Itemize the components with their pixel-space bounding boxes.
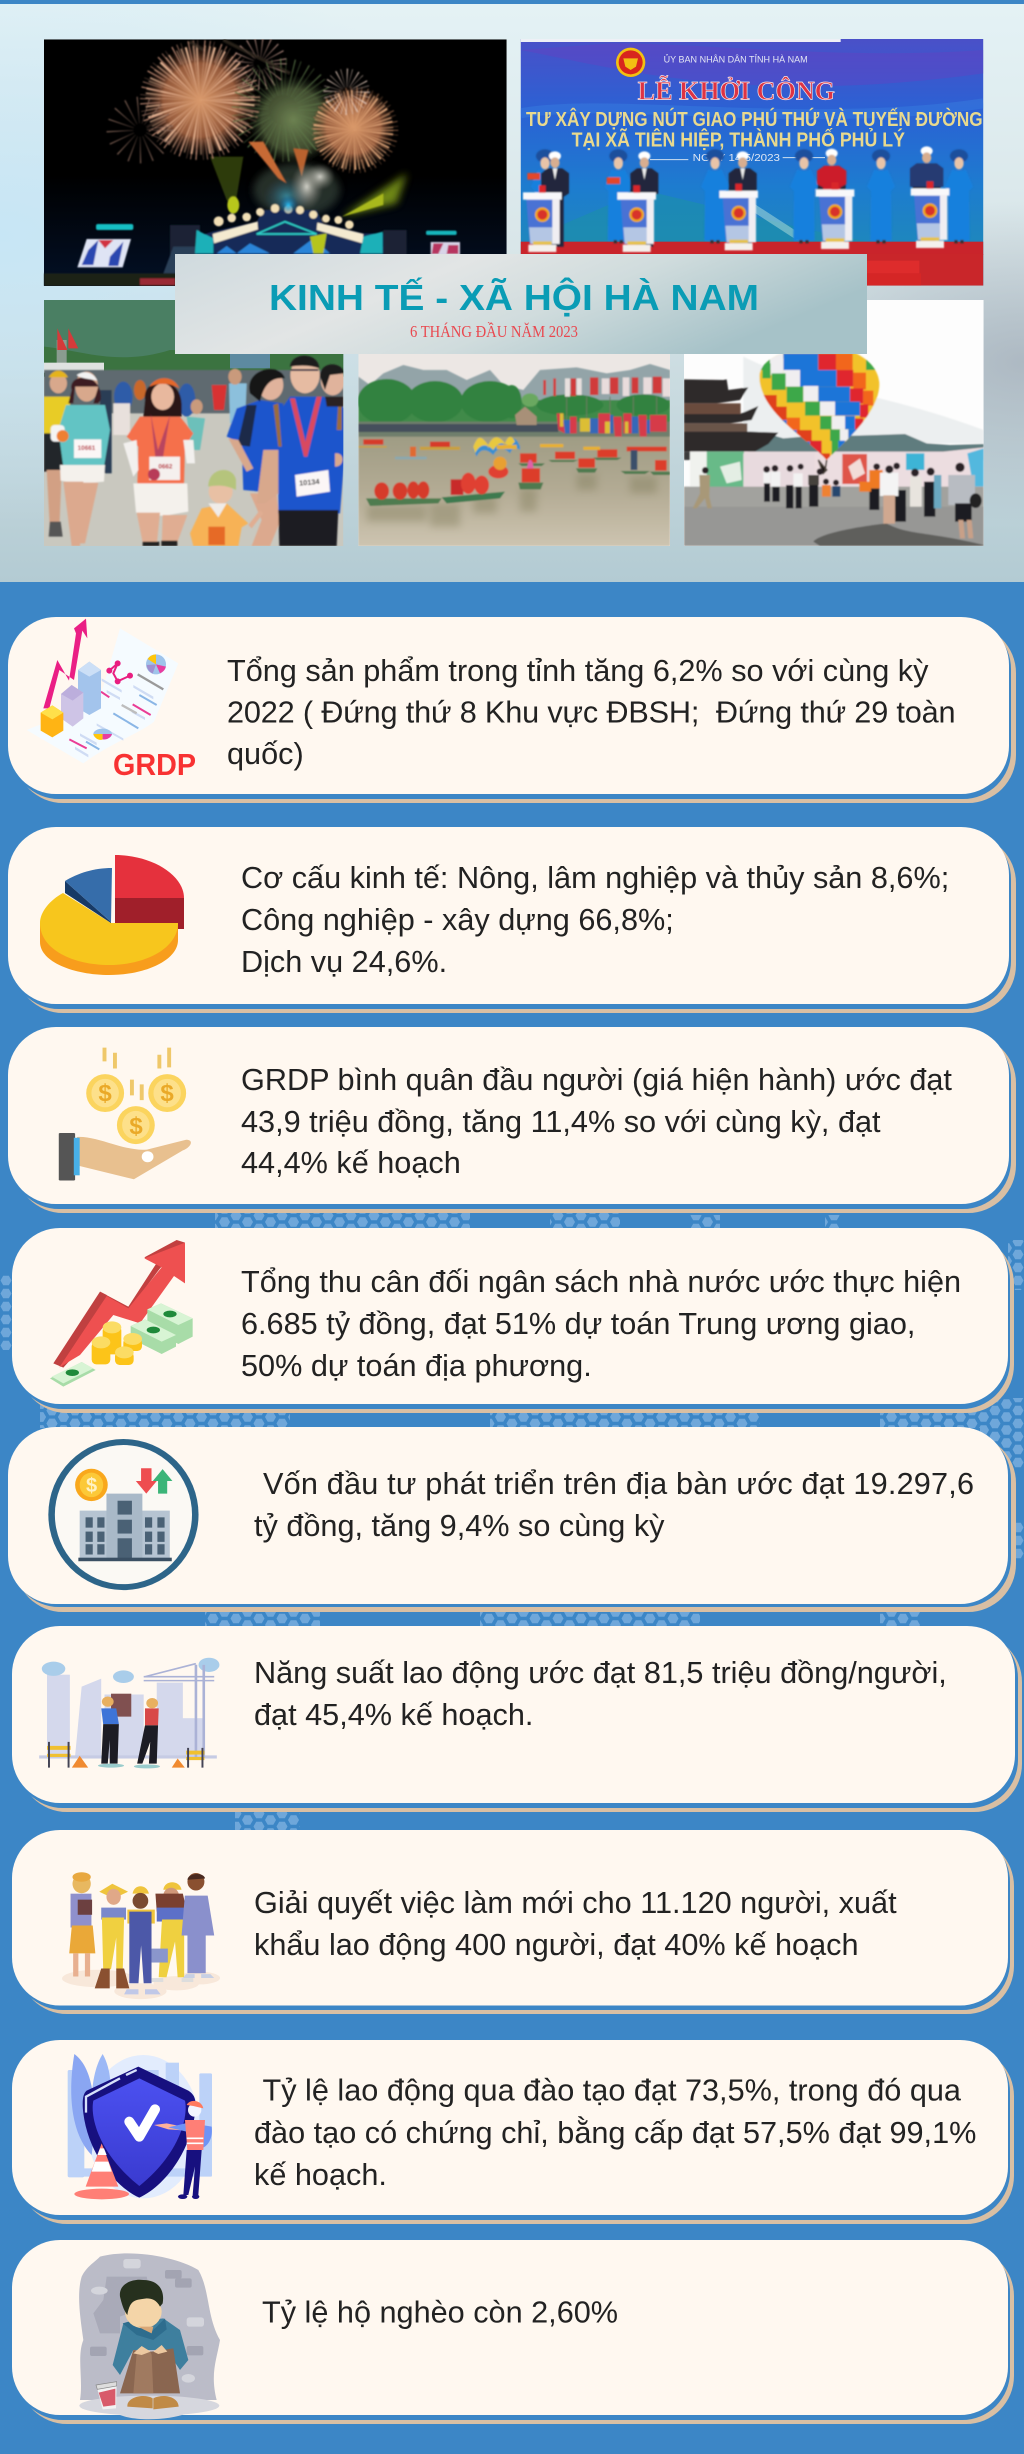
panel: new jobs bbox=[12, 1830, 1014, 2014]
fence banners bbox=[690, 447, 984, 489]
text block: 44,4% kế hoạch bbox=[241, 1146, 461, 1180]
panel: economic structure bbox=[8, 827, 1016, 1013]
text block: đào tạo có chứng chỉ, bằng cấp đạt 57,5% đạt 99,1% bbox=[254, 2115, 976, 2150]
title text: KINH TẾ - XÃ HỘI HÀ NAM bbox=[269, 276, 759, 318]
child with green cap bbox=[190, 470, 263, 546]
dollar signs bbox=[98, 1080, 174, 1140]
text block: 2022 ( Đứng thứ 8 Khu vực ĐBSH; Đứng thứ 29 toàn bbox=[227, 696, 956, 730]
panel: state budget revenue bbox=[12, 1228, 1014, 1413]
text block: quốc) bbox=[227, 737, 304, 771]
dollar signs: $ bbox=[129, 1113, 143, 1140]
GRDP label: GRDP bbox=[113, 747, 196, 782]
text block: Vốn đầu tư phát triển trên địa bàn ước đạt 19.297,6 bbox=[263, 1467, 974, 1501]
runner: blue shirt woman bbox=[227, 369, 285, 546]
emblem bbox=[616, 48, 645, 77]
tree line bbox=[357, 379, 670, 425]
text block: Công nghiệp - xây dựng 66,8%; bbox=[241, 903, 674, 937]
runner: man in blue shirt bbox=[257, 356, 345, 546]
text block: 43,9 triệu đồng, tăng 11,4% so với cùng kỳ, đạt bbox=[241, 1105, 881, 1139]
text block bbox=[254, 1656, 947, 1732]
crowd of visitors bbox=[693, 463, 982, 538]
background crowd bbox=[44, 369, 343, 473]
text block bbox=[254, 2074, 976, 2192]
icon: building in circle bbox=[48, 1439, 199, 1590]
text block: 50% dự toán địa phương. bbox=[241, 1349, 592, 1383]
balloon bbox=[758, 354, 880, 461]
text block: Tỷ lệ lao động qua đào tạo đạt 73,5%, trong đó qua bbox=[262, 2074, 962, 2108]
side screens and lights bbox=[44, 224, 460, 286]
text block: Dịch vụ 24,6%. bbox=[241, 945, 447, 979]
panel: GRDP growth bbox=[8, 617, 1016, 803]
stage backdrop text bbox=[526, 54, 983, 164]
text block: Năng suất lao động ước đạt 81,5 triệu đồng/người, bbox=[254, 1656, 947, 1690]
coin dollar sign: $ bbox=[86, 1475, 97, 1497]
text block: đạt 45,4% kế hoạch. bbox=[254, 1698, 533, 1732]
icon: rising arrow and money bbox=[50, 1240, 193, 1387]
panel: poverty rate bbox=[12, 2240, 1014, 2424]
runner: teal shirt: 10661 bbox=[78, 445, 96, 452]
runner: orange shirt bbox=[123, 378, 195, 546]
subtitle text: 6 THÁNG ĐẦU NĂM 2023 bbox=[410, 322, 578, 341]
banner: title bbox=[175, 254, 867, 354]
text block: Cơ cấu kinh tế: Nông, lâm nghiệp và thủy sản 8,6%; bbox=[241, 861, 949, 895]
panel: development investment bbox=[8, 1427, 1016, 1612]
ceremony participants bbox=[523, 146, 973, 252]
icon: safety shield with worker bbox=[68, 2054, 212, 2199]
runner: man in blue shirt: 10134 bbox=[299, 477, 321, 488]
boats bbox=[358, 439, 670, 506]
river bbox=[358, 437, 670, 546]
text block: GRDP bình quân đầu người (giá hiện hành) ước đạt bbox=[241, 1063, 952, 1097]
stage backdrop text: NGÀY 14/5/2023 bbox=[693, 151, 781, 164]
text block: khẩu lao động 400 người, đạt 40% kế hoạch bbox=[254, 1928, 858, 1962]
icon: group of workers bbox=[62, 1872, 220, 1999]
icon: pie chart bbox=[40, 855, 184, 975]
icon: GRDP report with chart bbox=[27, 619, 178, 763]
photo: fireworks over stage bbox=[44, 39, 507, 286]
yellow light beams bbox=[210, 157, 407, 217]
mountains bbox=[754, 433, 984, 453]
icon: person sitting against wall bbox=[79, 2253, 220, 2419]
red carpet bbox=[521, 242, 983, 286]
panel: labour productivity bbox=[12, 1626, 1022, 1812]
text block bbox=[241, 861, 949, 979]
text block: kế hoạch. bbox=[254, 2158, 387, 2192]
text block: Tổng sản phẩm trong tỉnh tăng 6,2% so với cùng kỳ bbox=[227, 654, 929, 688]
text block: tỷ đồng, tăng 9,4% so cùng kỳ bbox=[254, 1509, 665, 1543]
stage backdrop text: TẠI XÃ TIÊN HIỆP, THÀNH PHỐ PHỦ LÝ bbox=[572, 128, 905, 152]
text block bbox=[227, 654, 956, 771]
runner: teal shirt bbox=[51, 372, 110, 546]
text block: 6.685 tỷ đồng, đạt 51% dự toán Trung ương giao, bbox=[241, 1307, 915, 1341]
flags bbox=[543, 377, 670, 440]
top strip bbox=[0, 0, 1024, 4]
text block: Giải quyết việc làm mới cho 11.120 người, xuất bbox=[254, 1886, 897, 1920]
photo: groundbreaking ceremony bbox=[521, 39, 983, 286]
runner: yellow top bbox=[44, 371, 68, 537]
runner: orange shirt: 0662 bbox=[158, 463, 173, 470]
icon: construction workers in city bbox=[39, 1658, 219, 1768]
text block bbox=[254, 1886, 897, 1962]
panel: trained labour bbox=[12, 2040, 1014, 2224]
icon: hand with coins bbox=[59, 1048, 191, 1180]
limestone mountains bbox=[358, 364, 670, 400]
dollar signs: $ bbox=[160, 1080, 174, 1107]
dollar signs: $ bbox=[98, 1080, 112, 1107]
panel: header background bbox=[0, 4, 1024, 582]
pagoda bbox=[684, 379, 778, 460]
stage backdrop text: LỄ KHỞI CÔNG bbox=[638, 74, 835, 105]
text block bbox=[241, 1265, 961, 1383]
photo: hot air balloon at pagoda bbox=[684, 300, 984, 546]
ground bbox=[684, 487, 984, 546]
firework bursts bbox=[120, 40, 395, 210]
stage backdrop text: ỦY BAN NHÂN DÂN TỈNH HÀ NAM bbox=[664, 54, 808, 65]
panel: GRDP per capita bbox=[8, 1027, 1016, 1213]
stage bbox=[163, 195, 407, 273]
photo: marathon runners bbox=[44, 300, 345, 546]
hexagon background pattern bbox=[0, 1200, 1024, 1830]
text block: Tỷ lệ hộ nghèo còn 2,60% bbox=[262, 2296, 618, 2330]
dragon boat arch bbox=[473, 439, 520, 457]
photo: boat festival on river bbox=[357, 353, 670, 546]
text block: Tổng thu cân đối ngân sách nhà nước ước thực hiện bbox=[241, 1265, 961, 1299]
text block bbox=[241, 1063, 952, 1180]
text block bbox=[254, 1467, 974, 1543]
